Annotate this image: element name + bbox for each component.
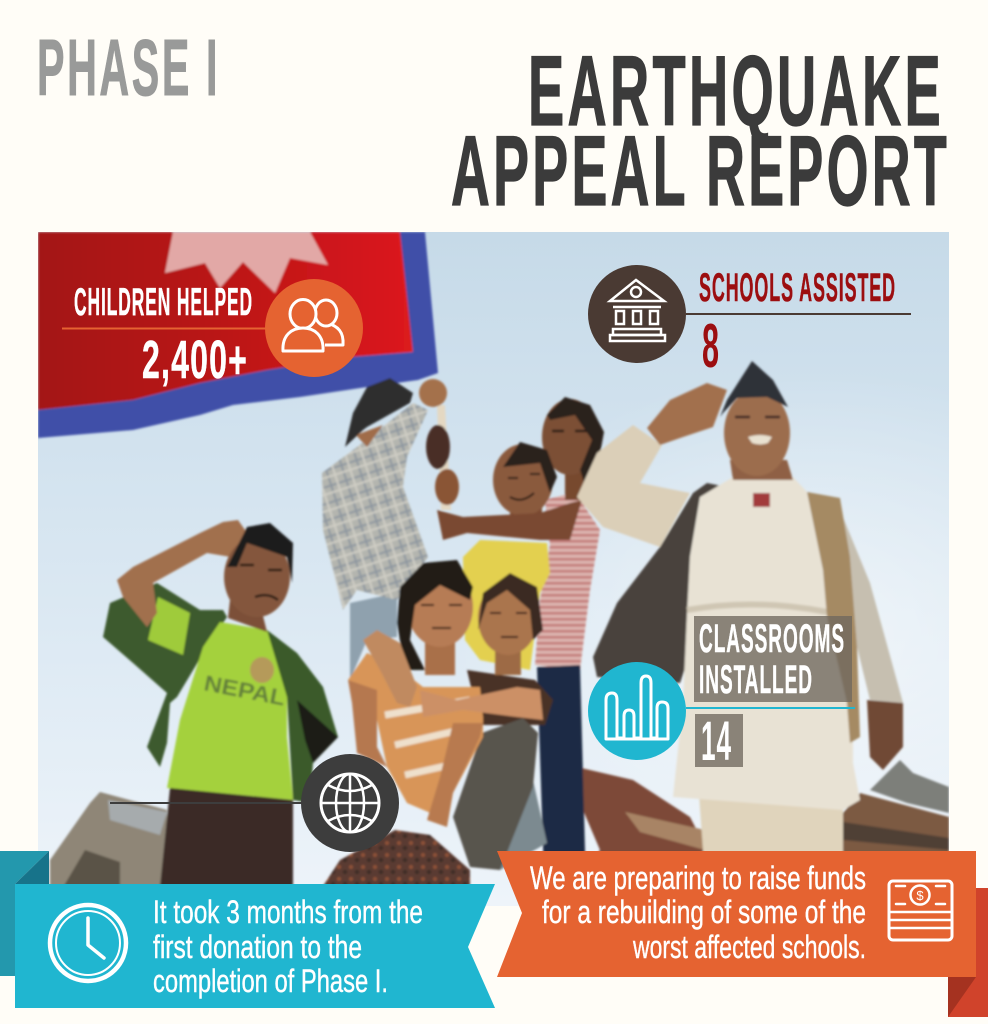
boy with cap and plaid shirt <box>322 378 459 680</box>
ribbon text: for a rebuilding of some of the <box>542 894 866 930</box>
value: 2,400+ <box>142 330 248 390</box>
stat: children helped <box>62 279 363 390</box>
tall girl <box>535 397 604 906</box>
boy in lime shirt: NEPAL <box>202 670 287 711</box>
icon: globe <box>321 774 379 832</box>
sky glow <box>608 462 949 748</box>
icon badge <box>265 279 363 377</box>
man saluting <box>577 361 903 906</box>
boy in yellow shirt <box>437 442 582 670</box>
badge <box>301 754 399 852</box>
rule <box>62 328 266 330</box>
ribbon text <box>153 894 423 999</box>
value box <box>695 714 743 767</box>
boy in lime shirt <box>103 520 338 906</box>
ribbon text: first donation to the <box>153 929 362 965</box>
photo: children and man saluting beneath the Nepal flag <box>38 232 949 906</box>
icon badge <box>588 265 686 363</box>
icon badge <box>588 662 686 760</box>
rule <box>110 802 305 804</box>
ribbon text: worst affected schools. <box>632 929 866 965</box>
right ribbon: fundraising <box>497 851 976 977</box>
stat: globe badge <box>110 754 399 852</box>
rubble and buildings <box>49 759 949 884</box>
flag pole <box>437 405 451 510</box>
sky <box>38 232 949 906</box>
icon: school building <box>610 280 665 341</box>
stat: schools assisted <box>588 265 911 381</box>
stat: classrooms installed: 14 <box>701 709 732 772</box>
crouching girl with orange top <box>322 558 544 884</box>
right ribbon fold <box>948 888 988 1017</box>
ribbon text <box>530 860 866 965</box>
left ribbon fold <box>0 851 49 976</box>
left ribbon: duration <box>15 884 495 1008</box>
stat: classrooms installed <box>588 616 855 772</box>
dollar sign: $ <box>916 888 924 903</box>
icon: clock <box>50 905 126 981</box>
icon: banknote stack <box>889 881 952 940</box>
flag: red field <box>38 232 413 410</box>
heading: INSTALLED <box>699 658 813 702</box>
flag: blue border <box>38 232 438 438</box>
stat: children helped: CHILDREN HELPED <box>74 281 253 324</box>
ribbon text: completion of Phase I. <box>153 963 388 999</box>
title <box>451 35 950 226</box>
flag: white star <box>165 232 328 293</box>
translucent label box <box>694 616 852 702</box>
icon: bar chart <box>606 676 668 739</box>
rule <box>686 707 855 709</box>
phase label: PHASE I <box>37 23 220 112</box>
ribbon text: We are preparing to raise funds <box>530 860 866 896</box>
crouching girl with long hair <box>453 573 553 870</box>
icon: people <box>283 300 343 351</box>
photo content <box>38 232 949 906</box>
stat: schools assisted: 8 <box>702 312 719 381</box>
rule <box>686 313 911 315</box>
ribbon text: It took 3 months from the <box>153 894 423 930</box>
